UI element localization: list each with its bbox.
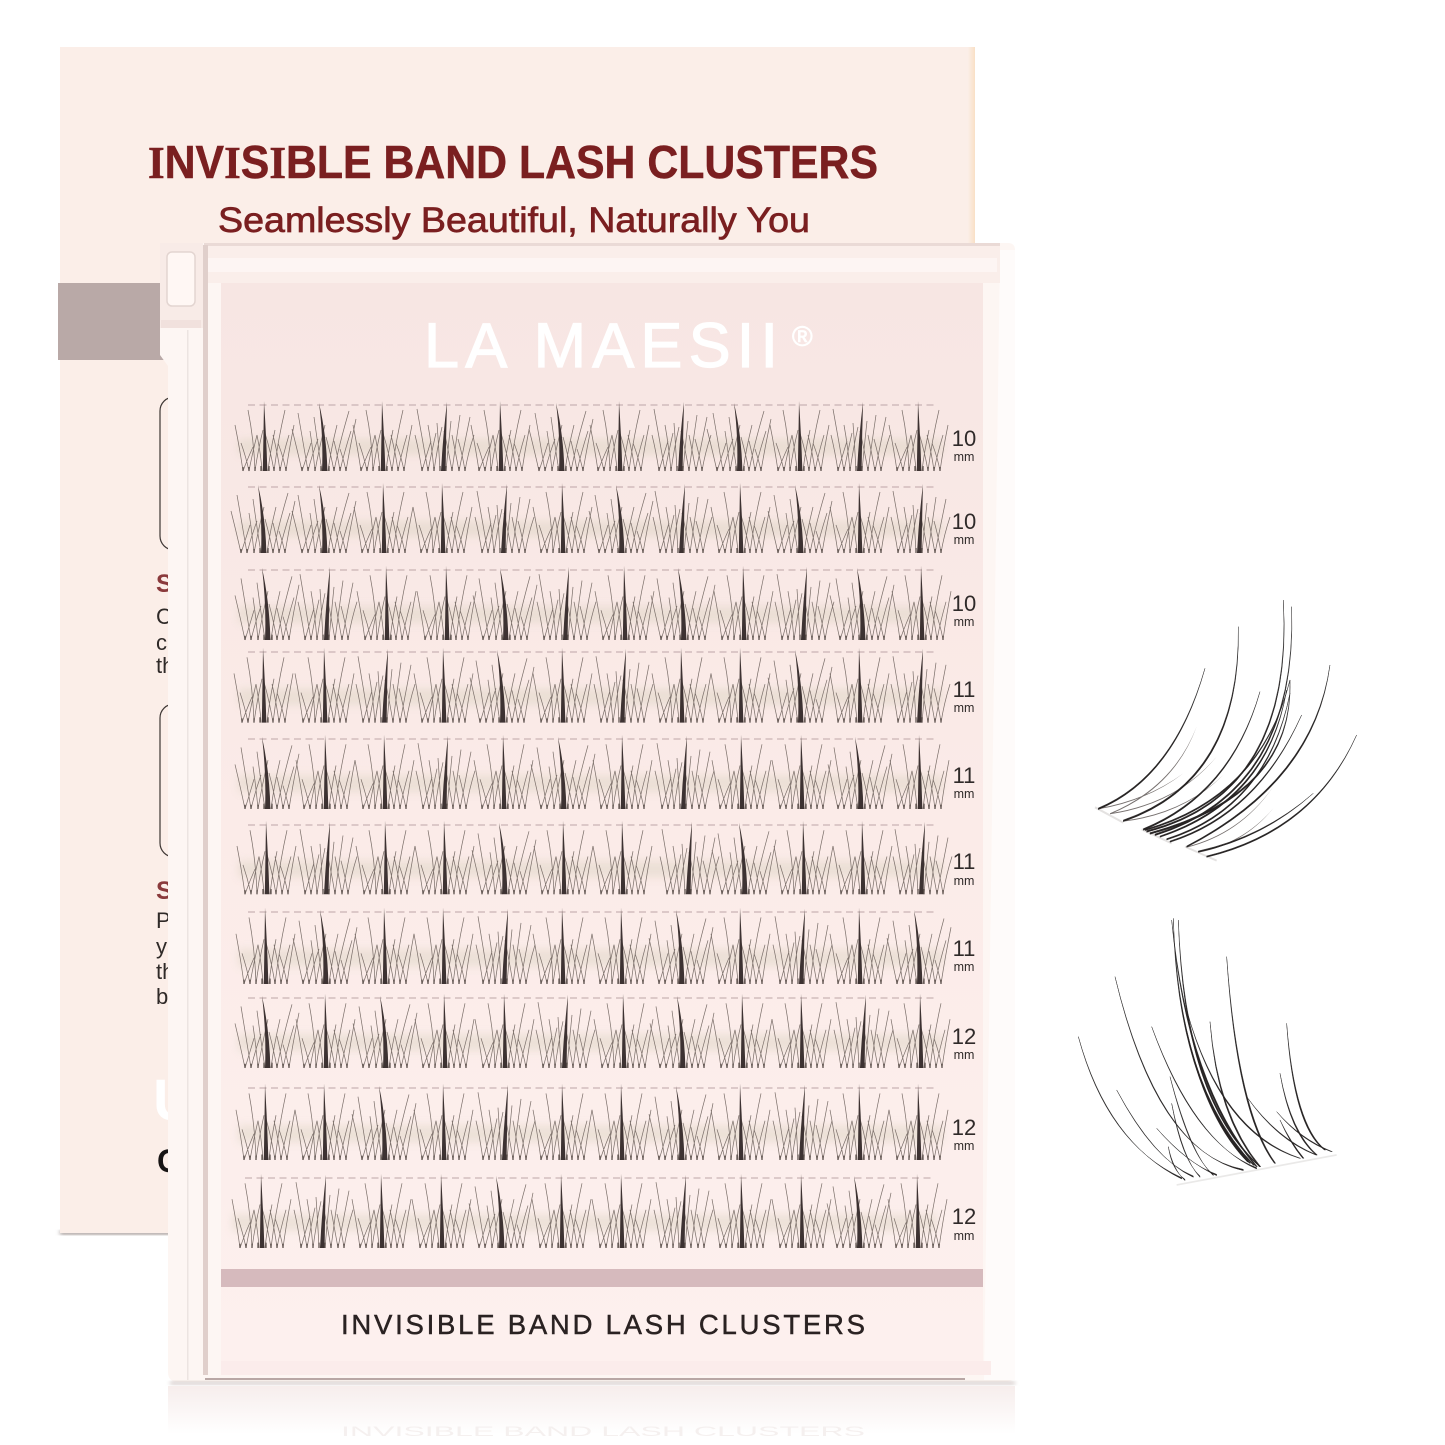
tray reflection: INVISIBLE BAND LASH CLUSTERS <box>341 1423 865 1439</box>
length labels: 11 <box>953 763 975 788</box>
length labels: 11 <box>953 677 975 702</box>
length labels: 12 <box>952 1024 976 1049</box>
lash row 5, 11 mm <box>235 735 949 809</box>
brand logo: LA MAESII <box>424 311 778 381</box>
box step text peeking out <box>153 570 195 1179</box>
length labels: mm <box>954 701 974 715</box>
lash row 1, 10 mm <box>235 401 948 471</box>
length labels: mm <box>954 1229 974 1243</box>
box step text peeking out: P <box>156 908 171 933</box>
box step text peeking out: S <box>156 570 173 598</box>
lash row 7, 11 mm <box>236 908 951 984</box>
box step text peeking out: b <box>156 984 168 1009</box>
card colour band <box>221 1269 983 1287</box>
lash cluster close-up, upper curved <box>1095 600 1357 861</box>
lash row 8, 12 mm <box>235 994 950 1068</box>
tray body <box>160 243 1015 1382</box>
box step text peeking out: U <box>153 1068 195 1133</box>
lash card <box>221 283 983 1361</box>
box step text peeking out: C <box>156 604 172 629</box>
brand logo: ® <box>792 321 813 352</box>
panel: transparent lash tray <box>160 243 1015 1439</box>
length labels: 10 <box>952 509 976 534</box>
length labels: 12 <box>952 1204 976 1229</box>
length labels: 12 <box>952 1115 976 1140</box>
lash row 4, 11 mm <box>234 648 950 723</box>
tray hinge <box>160 243 203 328</box>
lash row 9, 12 mm <box>236 1084 948 1160</box>
box step text peeking out: C <box>157 1143 180 1179</box>
length labels <box>952 426 976 1243</box>
length labels: 10 <box>952 591 976 616</box>
card product name: INVISIBLE BAND LASH CLUSTERS <box>341 1309 865 1340</box>
length labels: mm <box>954 533 974 547</box>
box step text peeking out: th <box>156 653 174 678</box>
box step text peeking out: c <box>156 630 167 655</box>
length labels: mm <box>954 1139 974 1153</box>
length labels: mm <box>954 960 974 974</box>
length labels: mm <box>954 1048 974 1062</box>
lash row 3, 10 mm <box>235 566 951 640</box>
lash row 2, 10 mm <box>231 483 950 553</box>
length labels: 11 <box>953 936 975 961</box>
length labels: mm <box>954 787 974 801</box>
length labels: mm <box>954 874 974 888</box>
length labels: mm <box>954 450 974 464</box>
length labels: 10 <box>952 426 976 451</box>
box heading: INVISIBLE BAND LASH CLUSTERS <box>148 136 878 188</box>
lash cluster close-up, lower curved <box>1078 918 1337 1185</box>
length labels: mm <box>954 615 974 629</box>
panel: product box behind the tray <box>58 47 975 1235</box>
tray reflection <box>168 1386 1015 1439</box>
box subtitle: Seamlessly Beautiful, Naturally You <box>218 201 810 240</box>
box step text peeking out: y <box>156 934 167 959</box>
box step text peeking out: S <box>156 877 173 905</box>
length labels: 11 <box>953 849 975 874</box>
lash row 10, 12 mm <box>232 1174 947 1248</box>
box step text peeking out: th <box>156 959 174 984</box>
lash row 6, 11 mm <box>237 821 952 894</box>
box step frames peeking out <box>160 397 280 857</box>
